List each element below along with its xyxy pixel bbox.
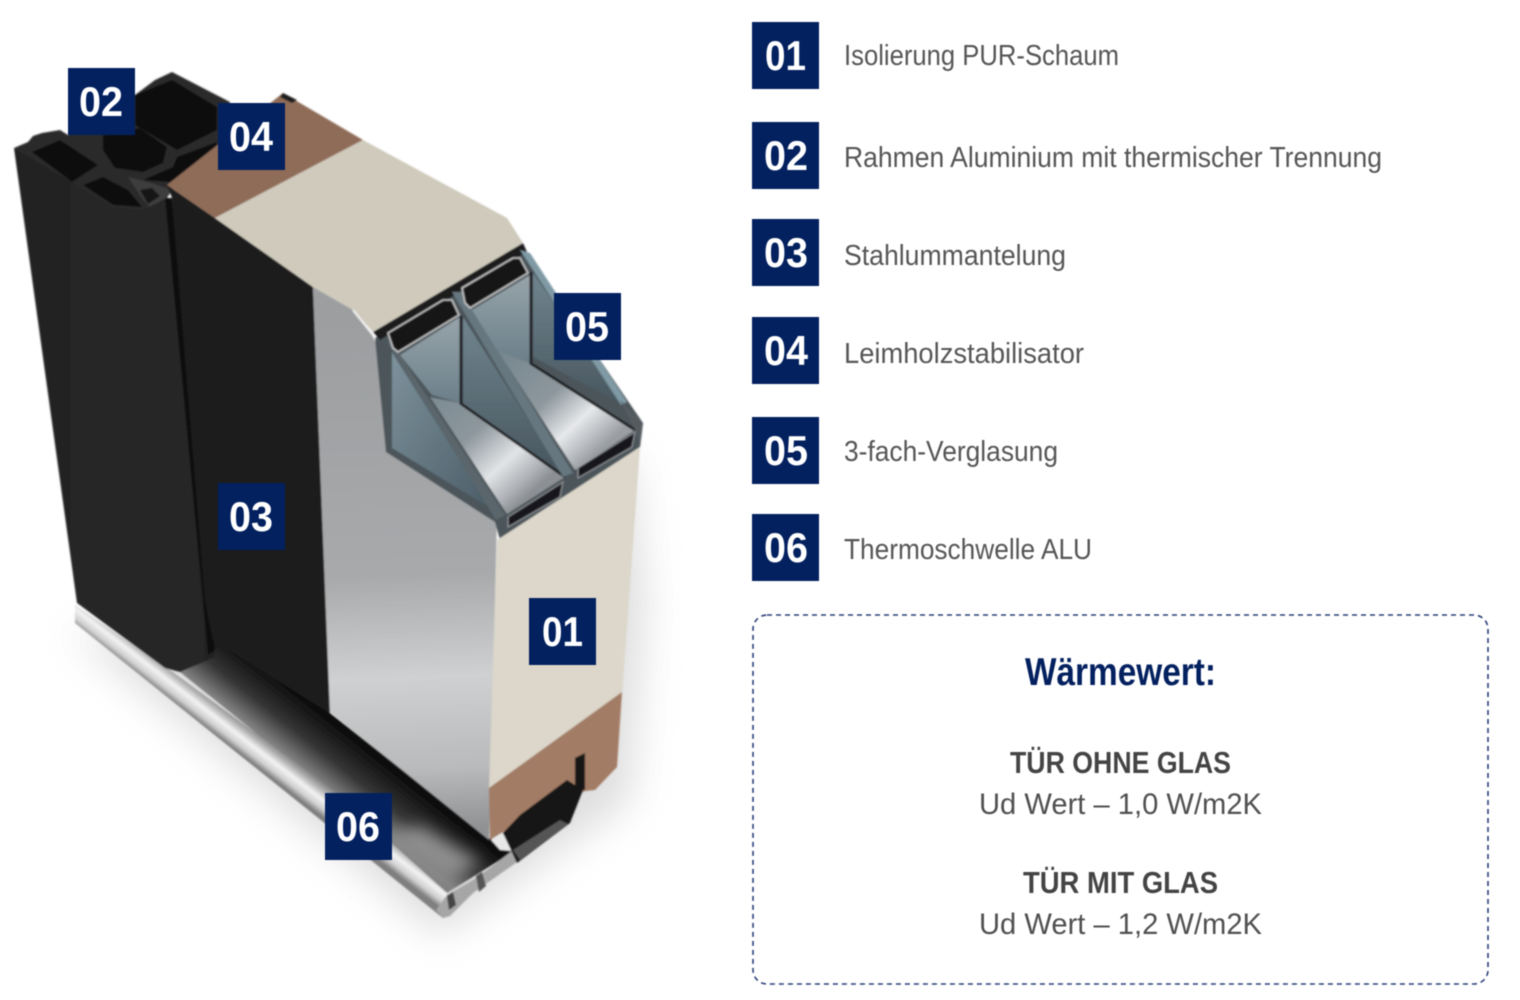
legend item 06	[752, 514, 1092, 581]
legend item 01: 01	[765, 32, 806, 79]
marker 02: 02	[79, 78, 123, 125]
legend item 04	[752, 317, 1084, 384]
panel heading: Wärmewert:	[1025, 651, 1216, 694]
door without glass value: Ud Wert – 1,0 W/m2K	[979, 788, 1262, 821]
marker 04: 04	[229, 113, 274, 160]
frame front face	[14, 148, 215, 672]
beige foam front	[489, 447, 640, 788]
glazing	[373, 243, 643, 540]
marker 06	[325, 793, 392, 860]
dark side of door leaf	[167, 185, 330, 713]
legend item 02: Rahmen Aluminium mit thermischer Trennung	[844, 142, 1382, 174]
door cross-section illustration	[14, 72, 645, 935]
wood stabilizer top	[167, 93, 363, 218]
aluminium frame	[14, 72, 230, 672]
legend item 01: Isolierung PUR-Schaum	[844, 40, 1119, 72]
marker 06: 06	[336, 803, 380, 850]
marker 05: 05	[565, 303, 609, 350]
spacer bars	[508, 482, 563, 527]
soft floor shadow	[70, 450, 645, 935]
legend list	[752, 22, 1382, 581]
frame seam	[165, 198, 215, 655]
marker 03	[218, 483, 285, 550]
pane 2	[462, 258, 635, 470]
frame chambers	[32, 80, 217, 207]
door with glass value: Ud Wert – 1,2 W/m2K	[979, 908, 1262, 941]
thermal value panel	[753, 615, 1488, 984]
wood stabilizer bottom	[489, 692, 622, 840]
legend item 02: 02	[764, 132, 808, 179]
legend item 05: 3-fach-Verglasung	[844, 436, 1058, 468]
left wall	[392, 352, 490, 508]
legend item 02	[752, 122, 1382, 189]
marker 01: 01	[542, 608, 583, 655]
legend item 04: Leimholzstabilisator	[844, 338, 1084, 370]
legend item 04: 04	[764, 327, 809, 374]
pane 1	[388, 300, 565, 514]
right glazing strip	[520, 250, 627, 405]
legend item 06: 06	[764, 524, 808, 571]
door without glass heading: TÜR OHNE GLAS	[1010, 745, 1231, 780]
beige foam top	[215, 140, 523, 332]
legend item 03: Stahlummantelung	[844, 240, 1066, 272]
brushed steel panel	[313, 287, 497, 840]
marker 05	[554, 293, 621, 360]
marker 03: 03	[229, 493, 273, 540]
legend item 03	[752, 219, 1066, 286]
first diagonal bar	[386, 340, 505, 520]
legend item 03: 03	[764, 229, 808, 276]
legend item 05: 05	[764, 427, 808, 474]
threshold seal	[503, 753, 585, 863]
marker 01	[529, 598, 596, 665]
legend item 01	[752, 22, 1119, 89]
door with glass heading: TÜR MIT GLAS	[1023, 865, 1218, 900]
threshold sill	[75, 605, 520, 918]
marker 02	[68, 68, 135, 135]
legend item 05	[752, 417, 1058, 484]
legend item 06: Thermoschwelle ALU	[844, 534, 1092, 566]
marker 04	[218, 103, 285, 170]
second diagonal bar	[452, 292, 573, 477]
